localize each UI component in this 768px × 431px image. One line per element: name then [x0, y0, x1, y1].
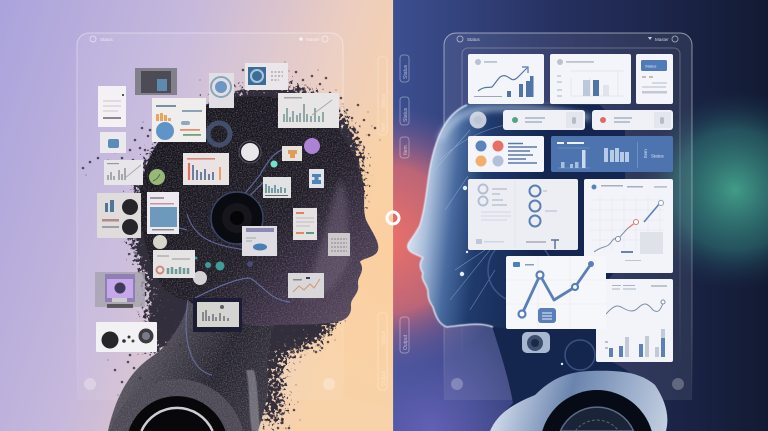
card: growth trend [468, 54, 544, 104]
head mass [140, 96, 378, 326]
card: area chart [278, 93, 339, 128]
card: tall button: Status [645, 64, 656, 68]
neck and shoulder [108, 298, 275, 431]
card: orange tag [282, 146, 302, 161]
card: dark framed chart [193, 298, 242, 332]
dissolving particles around human head [83, 62, 380, 428]
card: colored legend [468, 136, 544, 172]
right panel header labels [457, 36, 678, 42]
right side vertical labels [400, 55, 409, 353]
head node: blue ring [208, 123, 230, 145]
dissolving particle cloud around human head [128, 83, 364, 431]
card: bar chart [550, 54, 631, 104]
card: orange list [293, 208, 317, 240]
card: blue analytics: Status [651, 154, 665, 158]
card: line plot [288, 273, 324, 298]
right side vertical labels: Status [403, 107, 409, 122]
left side vertical labels: Status [381, 330, 387, 345]
card: blue info [147, 192, 179, 234]
camera module [522, 332, 550, 353]
shoulder ring core [129, 396, 225, 431]
card: line chart [104, 160, 143, 185]
right panel header labels: Status [467, 37, 481, 42]
head profile [408, 101, 625, 335]
card: grid table [328, 233, 350, 256]
left panel header labels: Master [306, 37, 320, 42]
left panel header labels [90, 36, 328, 42]
card: gauge panel [242, 226, 277, 256]
card: top dashboard [245, 63, 288, 90]
face rim light [408, 105, 493, 327]
card: purple machine [95, 272, 145, 308]
shoulder core [542, 390, 652, 431]
neck [490, 300, 670, 431]
head top glow [440, 108, 590, 140]
right panel frame: glass panel [444, 33, 692, 400]
human head: dissolving profile silhouette [108, 96, 378, 431]
card: bar report [183, 153, 229, 185]
wires inside human head [150, 150, 290, 375]
node: white disc [239, 141, 261, 163]
card: blue analytics [551, 136, 673, 172]
left panel corner dots [84, 378, 335, 390]
cheek highlight [300, 180, 350, 300]
shoulder fan inner [575, 420, 619, 431]
card: cloud badge [209, 73, 234, 108]
right side vertical labels: Item [403, 145, 409, 155]
card: step list [468, 179, 578, 250]
right panel header labels: Master [655, 37, 669, 42]
left panel header labels: Status [100, 37, 114, 42]
neural lens: black circle in head [211, 192, 263, 244]
card: document [98, 86, 126, 127]
node: avatar disc [470, 112, 486, 128]
centre divider ring [387, 0, 399, 431]
right side vertical labels: Output [403, 334, 409, 350]
card: blue analytics: Item [643, 149, 648, 158]
right panel corner dots [451, 378, 684, 390]
AI dashboard cards [468, 54, 673, 362]
pill: green status [503, 110, 585, 130]
neck highlight [246, 370, 260, 431]
pill: red status [592, 110, 673, 130]
glow nodes [194, 256, 253, 270]
node: purple disc [304, 138, 320, 154]
card: tall button [636, 54, 673, 104]
shoulder fan [560, 407, 634, 431]
card: small device [100, 132, 126, 153]
shoulder ring [111, 379, 243, 431]
card: wave and bars [596, 279, 673, 362]
face circuit lines [430, 122, 545, 310]
node: green glow [270, 160, 278, 168]
shoulder ring light [141, 408, 213, 431]
card: multi status [153, 250, 195, 278]
left side vertical labels: Output [381, 370, 387, 386]
card: growth plot [584, 179, 673, 273]
card: gray machine [135, 68, 177, 95]
left background: human side gradient [0, 0, 393, 431]
left side vertical labels: Status [381, 93, 387, 108]
card: report with pie [152, 98, 206, 142]
card: green chart [263, 177, 291, 198]
right background: AI side gradient [393, 0, 768, 431]
card: featured line chart [506, 256, 606, 329]
right side vertical labels: Status [403, 64, 409, 79]
node: grey disc [153, 235, 167, 249]
left floating cards [95, 63, 350, 352]
card: blue icon [309, 169, 324, 188]
glow points [460, 186, 563, 365]
panel frame: left glass panel [77, 33, 343, 400]
left side vertical labels [378, 57, 387, 390]
node: grey disc lower [193, 271, 207, 285]
card: speaker unit [97, 193, 141, 238]
node: green disc [149, 169, 165, 185]
shoulder [490, 371, 667, 431]
left side vertical labels: Item [381, 122, 387, 132]
AI head: luminous profile silhouette [408, 101, 670, 431]
inner head ring [488, 238, 595, 370]
card: white device with lenses [96, 322, 157, 352]
